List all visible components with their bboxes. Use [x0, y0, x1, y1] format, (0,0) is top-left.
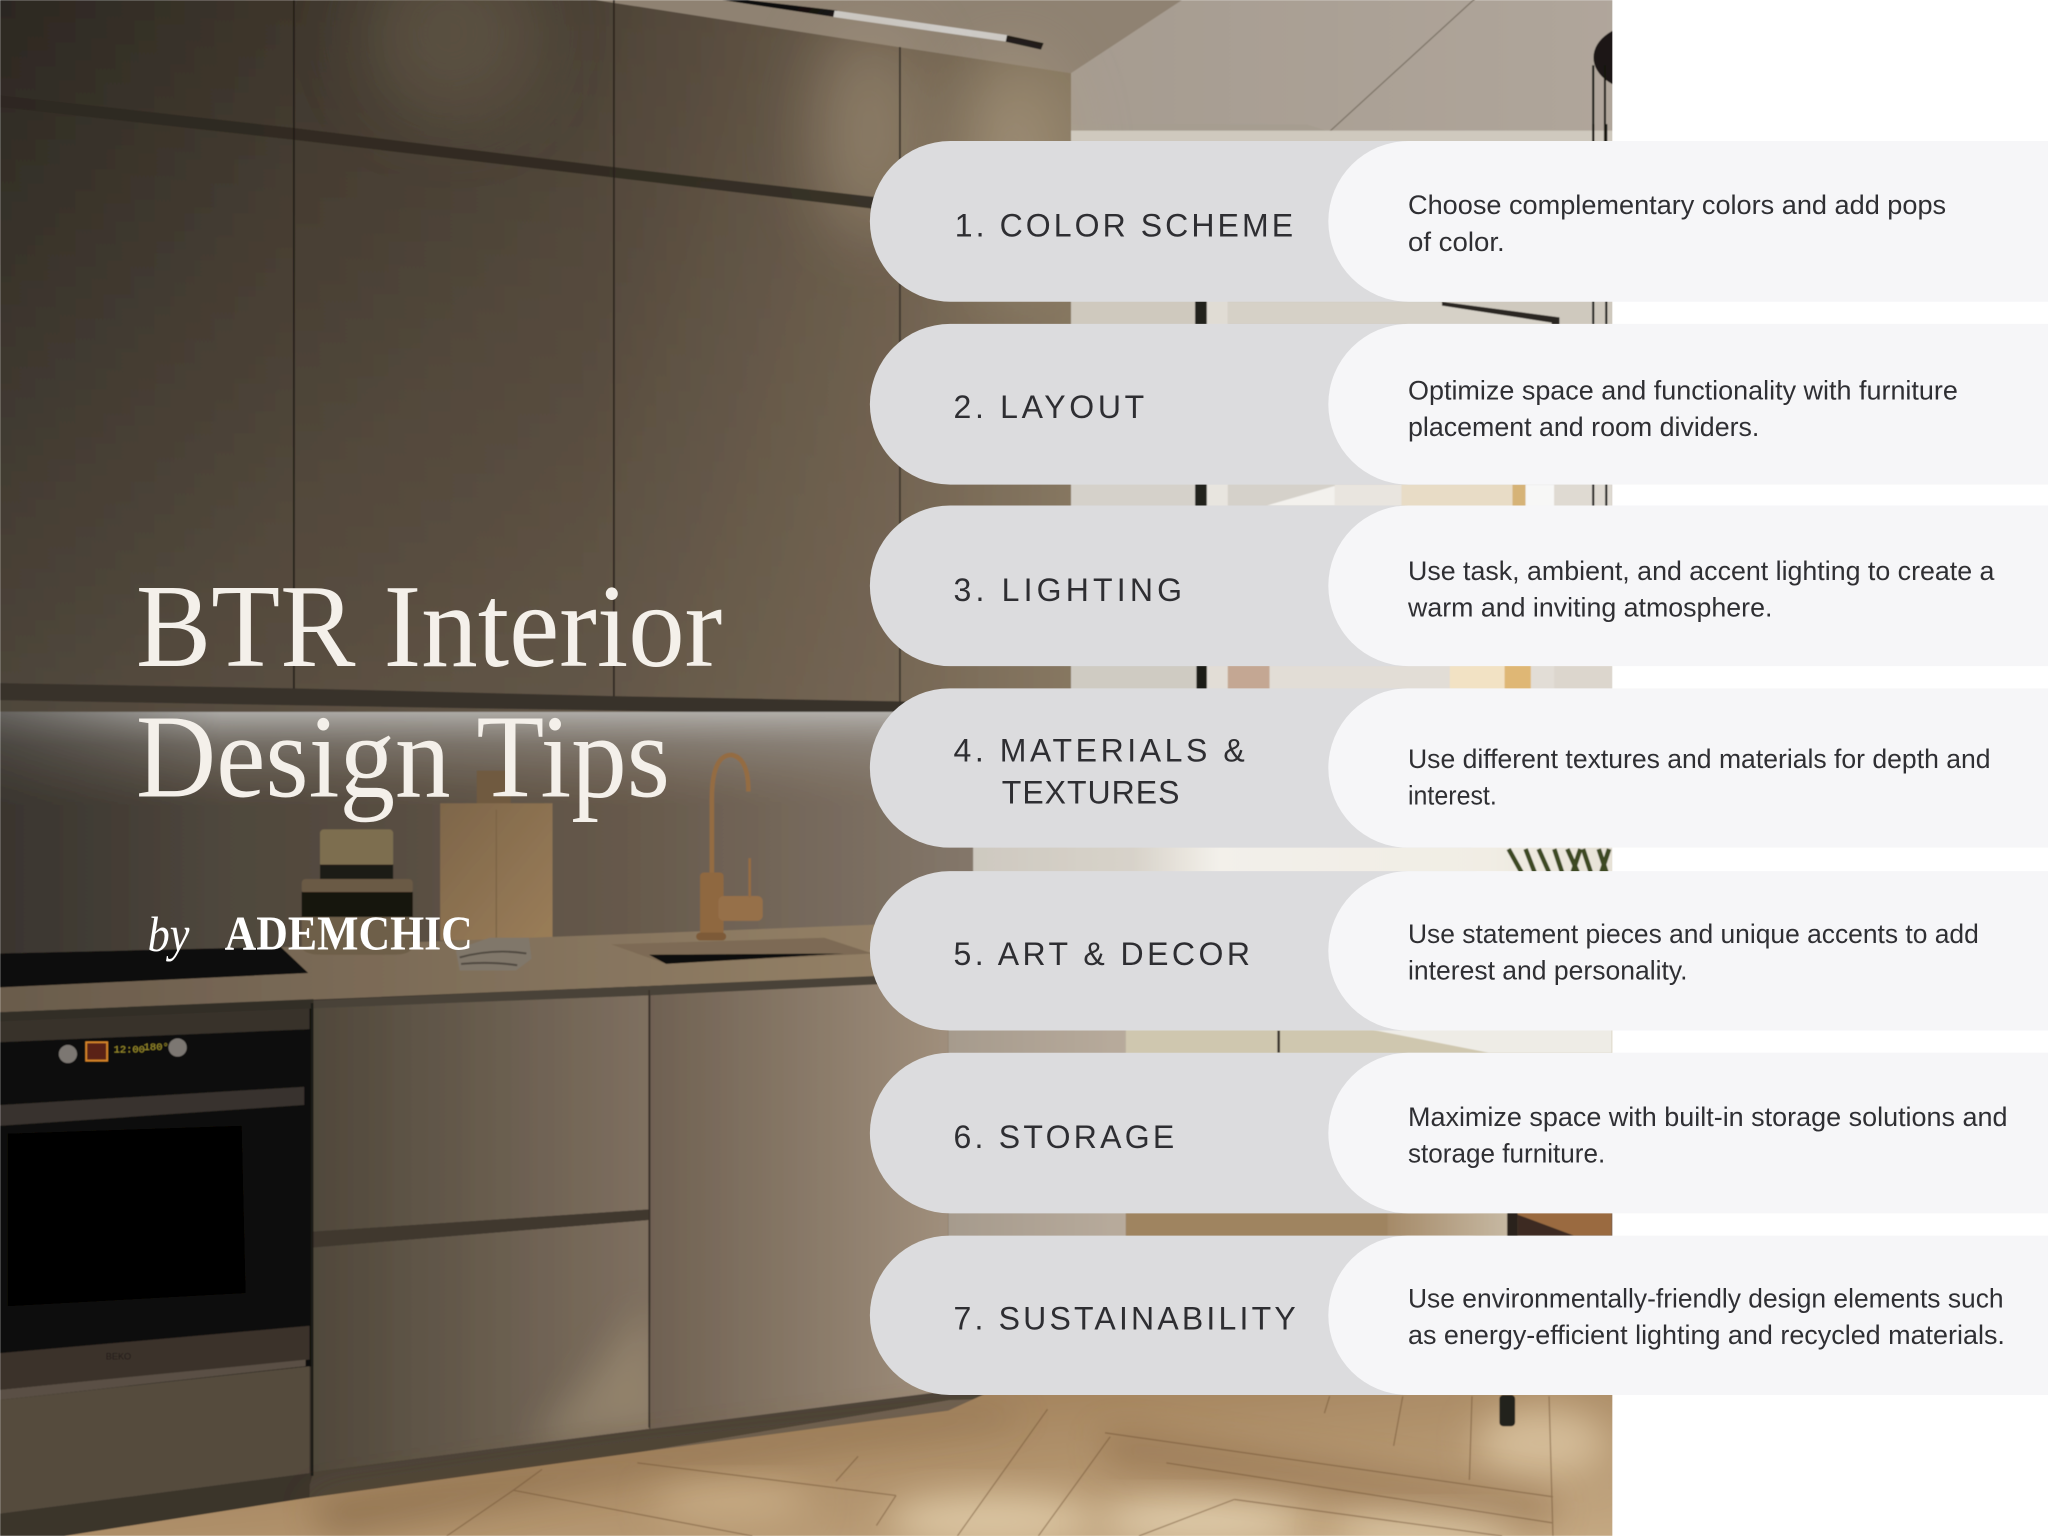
photo base tone	[641, 1213, 1612, 1452]
white margin	[1612, 0, 2048, 1536]
tip 3: lighting: Use task, ambient, and accent lighting to create a	[1408, 556, 1995, 586]
tip 6: storage: storage furniture.	[1408, 1138, 1605, 1168]
oven: BEKO	[106, 1352, 131, 1362]
counter top	[0, 924, 877, 1021]
tip 4: materials and textures: Use different textures and materials for depth and	[1408, 744, 1991, 774]
tip 7: sustainability	[870, 1236, 2048, 1395]
tip 6: storage: 6. STORAGE	[953, 1119, 1174, 1155]
vases	[302, 829, 413, 955]
title: BTR Interior	[136, 560, 722, 692]
tip 3: lighting: 3. LIGHTING	[953, 572, 1182, 608]
tip 5: art and decor: Use statement pieces and unique accents to add	[1408, 919, 1979, 949]
tip 2: layout: placement and room dividers.	[1408, 412, 1759, 442]
tip 7: sustainability: as energy-efficient lighting and recycled materials.	[1408, 1320, 2005, 1350]
cutting board	[440, 771, 552, 940]
tip 2: layout: Optimize space and functionality with furniture	[1408, 376, 1958, 406]
tip 3: lighting: warm and inviting atmosphere.	[1407, 592, 1772, 622]
tip 5: art and decor: 5. ART & DECOR	[953, 936, 1250, 972]
tip 2: layout: 2. LAYOUT	[953, 389, 1144, 425]
lower drawers	[306, 990, 1032, 1498]
wood floor	[64, 1384, 1620, 1536]
oven: 12:00	[114, 1045, 145, 1057]
tip 4: materials and textures: interest.	[1408, 781, 1497, 811]
pendant lamp canopy	[1592, 24, 1693, 144]
interior seen through gaps	[948, 124, 1620, 1242]
oven: 180°	[144, 1042, 169, 1054]
byline	[148, 907, 473, 962]
title: Design Tips	[136, 691, 670, 823]
backsplash wall with under-cabinet light	[0, 712, 973, 973]
low panel under oven	[0, 1366, 310, 1514]
tip 5: art and decor: interest and personality.	[1408, 956, 1688, 986]
faucet	[696, 755, 763, 940]
tip 7: sustainability: Use environmentally-friendly design elements such	[1408, 1283, 2004, 1313]
tall lower cabinet	[650, 981, 948, 1429]
tip 4: materials and textures: 4. MATERIALS &	[953, 732, 1245, 768]
tip 4: materials and textures: TEXTURES	[1002, 774, 1179, 810]
tip 6: storage: Maximize space with built-in storage solutions and	[1408, 1102, 2008, 1132]
upper cabinets	[0, 0, 1071, 731]
towel	[456, 938, 532, 970]
tip 6: storage	[870, 1053, 2048, 1213]
tip 4: materials and textures	[870, 688, 2048, 848]
tip 1: color scheme: of color.	[1408, 227, 1505, 257]
tip 2: layout	[870, 324, 2048, 485]
title	[136, 560, 722, 823]
tip 5: art and decor	[870, 871, 2048, 1031]
tip 1: color scheme: Choose complementary colors and add pops	[1408, 190, 1946, 220]
byline: ADEMCHIC	[225, 908, 473, 961]
tip 1: color scheme: 1. COLOR SCHEME	[955, 207, 1293, 243]
hob	[0, 947, 308, 987]
ceiling	[597, 0, 1612, 131]
sink	[611, 938, 872, 964]
tip 3: lighting	[870, 505, 2048, 666]
tip 1: color scheme	[870, 141, 2048, 302]
oven	[0, 1008, 313, 1400]
byline: by	[148, 907, 190, 962]
tip 7: sustainability: 7. SUSTAINABILITY	[953, 1301, 1296, 1337]
base under lower units	[309, 990, 652, 1484]
